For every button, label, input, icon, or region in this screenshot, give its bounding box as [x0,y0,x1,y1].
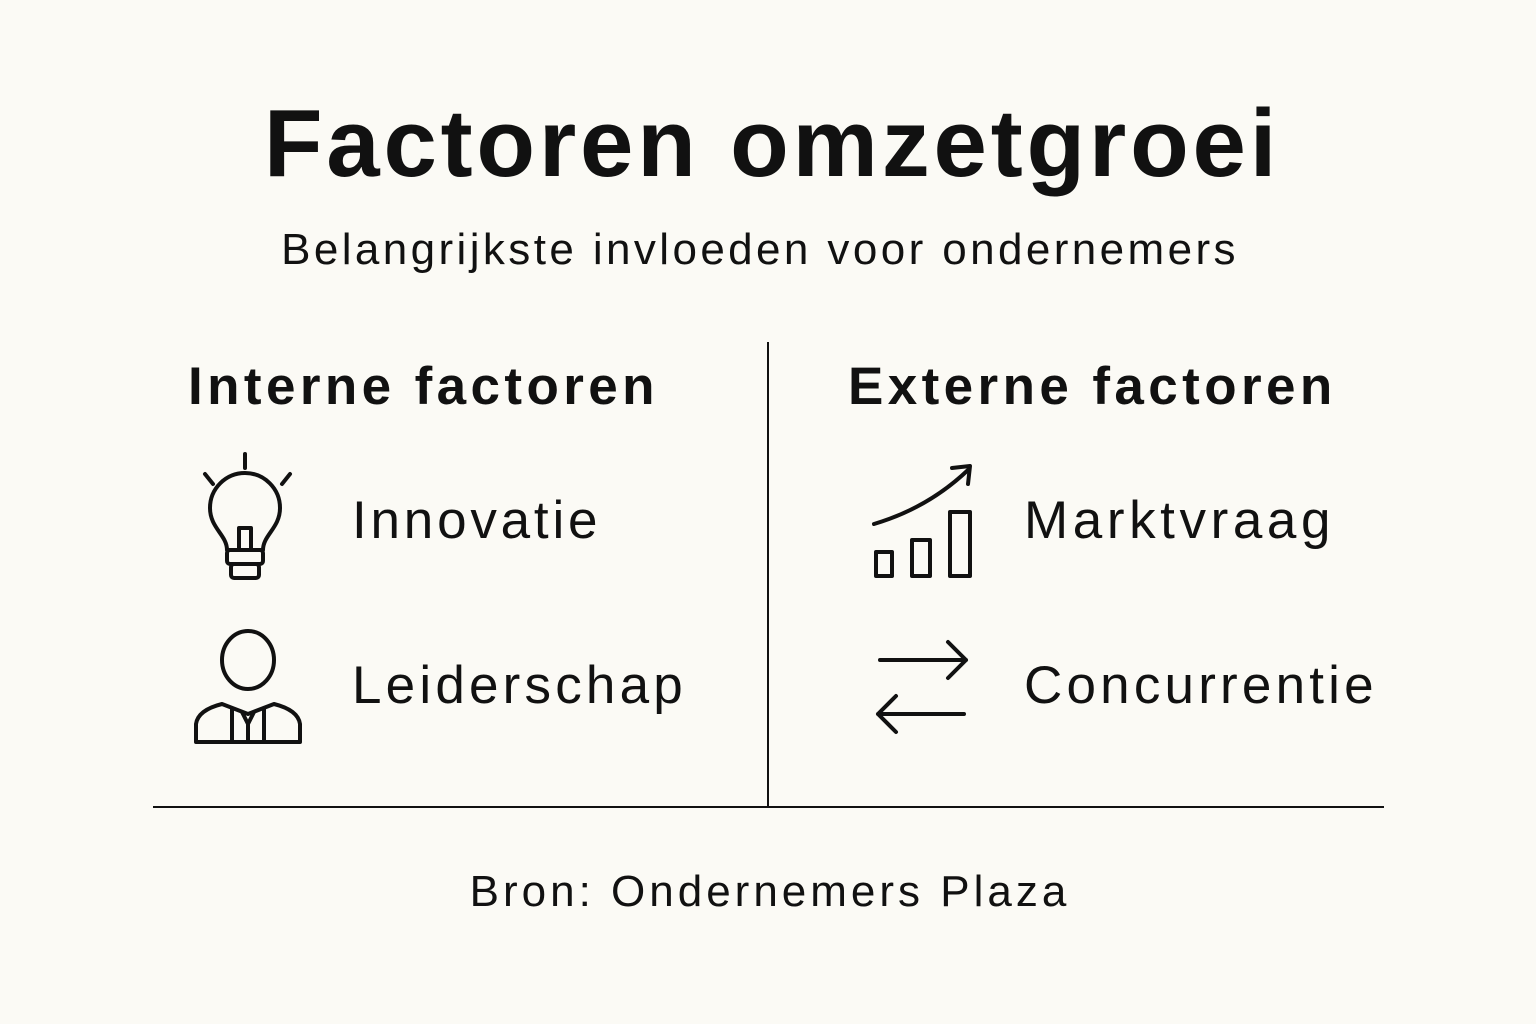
subtitle: Belangrijkste invloeden voor ondernemers [281,225,1239,274]
label: leiderschap: Leiderschap [352,656,687,715]
title: Factoren omzetgroei [264,90,1280,197]
label: marktvraag: Marktvraag [1024,491,1335,550]
horizontal divider [153,806,1384,808]
source: Bron: Ondernemers Plaza [470,867,1070,916]
heading: externe factoren: Externe factoren [848,357,1337,416]
label: concurrentie: Concurrentie [1024,656,1378,715]
icon: swap arrows [876,640,968,734]
vertical divider [767,342,769,807]
icon: lightbulb [202,452,292,580]
heading: interne factoren: Interne factoren [188,357,659,416]
icon: growth chart [872,464,972,578]
label: innovatie: Innovatie [352,491,601,550]
icon: leader person [194,629,302,744]
